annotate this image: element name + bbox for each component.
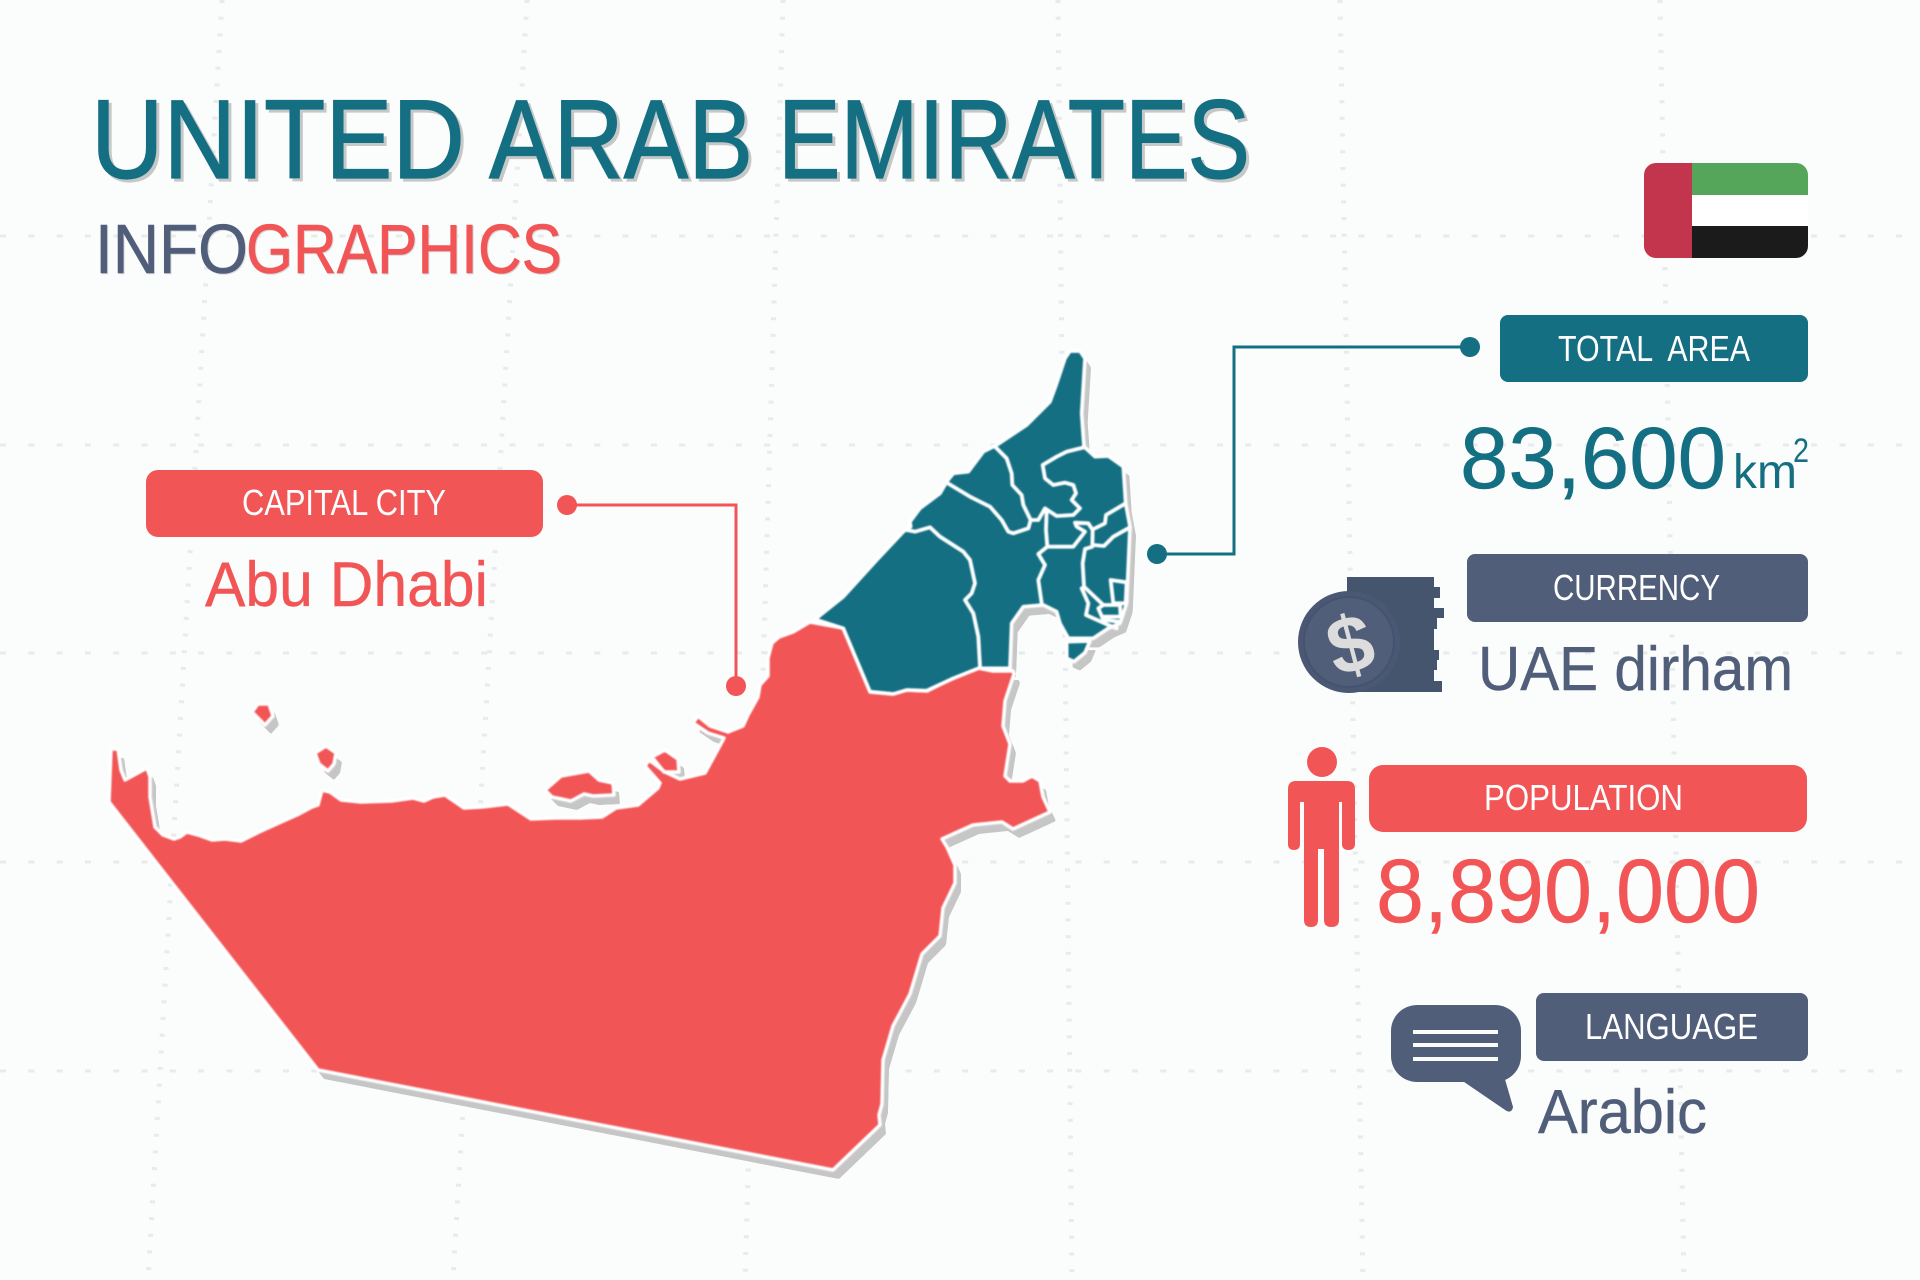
currency label: CURRENCY <box>1553 567 1720 608</box>
total area label: TOTAL AREA <box>1558 328 1750 369</box>
title: UNITED <box>91 77 465 202</box>
currency label <box>1467 554 1808 622</box>
icon: person <box>1288 747 1355 927</box>
icon: speech bubble <box>1391 1005 1521 1111</box>
language value: Arabic <box>1538 1078 1707 1147</box>
region: northern emirates in teal <box>815 351 1130 694</box>
map shadow <box>115 360 1136 1179</box>
capital city label <box>146 470 543 537</box>
map of the United Arab Emirates <box>109 351 1136 1179</box>
total area label <box>1500 315 1808 382</box>
icon: UAE flag <box>1644 163 1808 258</box>
subtitle: INFO <box>95 210 248 288</box>
capital connector line <box>557 495 746 696</box>
panel: population <box>1288 747 1807 942</box>
population value: 8,890,000 <box>1376 842 1760 942</box>
title <box>91 77 1250 202</box>
population label: POPULATION <box>1484 777 1683 818</box>
region: Abu Dhabi emirate in red <box>109 622 1050 1170</box>
population label <box>1369 765 1807 832</box>
subtitle <box>95 210 562 288</box>
currency value: UAE dirham <box>1478 635 1793 704</box>
total area value: 2 <box>1793 432 1809 470</box>
total area value: 83,600 <box>1460 410 1726 507</box>
title: EMIRATES <box>778 77 1250 202</box>
panel: currency <box>1298 554 1808 704</box>
icon: coins: $ <box>1317 596 1383 693</box>
capital city label: CAPITAL CITY <box>242 482 446 523</box>
panel: capital city <box>146 470 746 696</box>
total area value: km <box>1733 446 1797 499</box>
icon: coins <box>1298 577 1444 693</box>
total area connector line <box>1147 337 1480 564</box>
panel: language <box>1391 993 1808 1147</box>
title: ARAB <box>489 77 753 202</box>
subtitle: GRAPHICS <box>246 210 562 288</box>
capital city value: Abu Dhabi <box>205 550 488 620</box>
language label: LANGUAGE <box>1585 1006 1758 1047</box>
language label <box>1536 993 1808 1061</box>
panel: total area <box>1147 315 1809 564</box>
